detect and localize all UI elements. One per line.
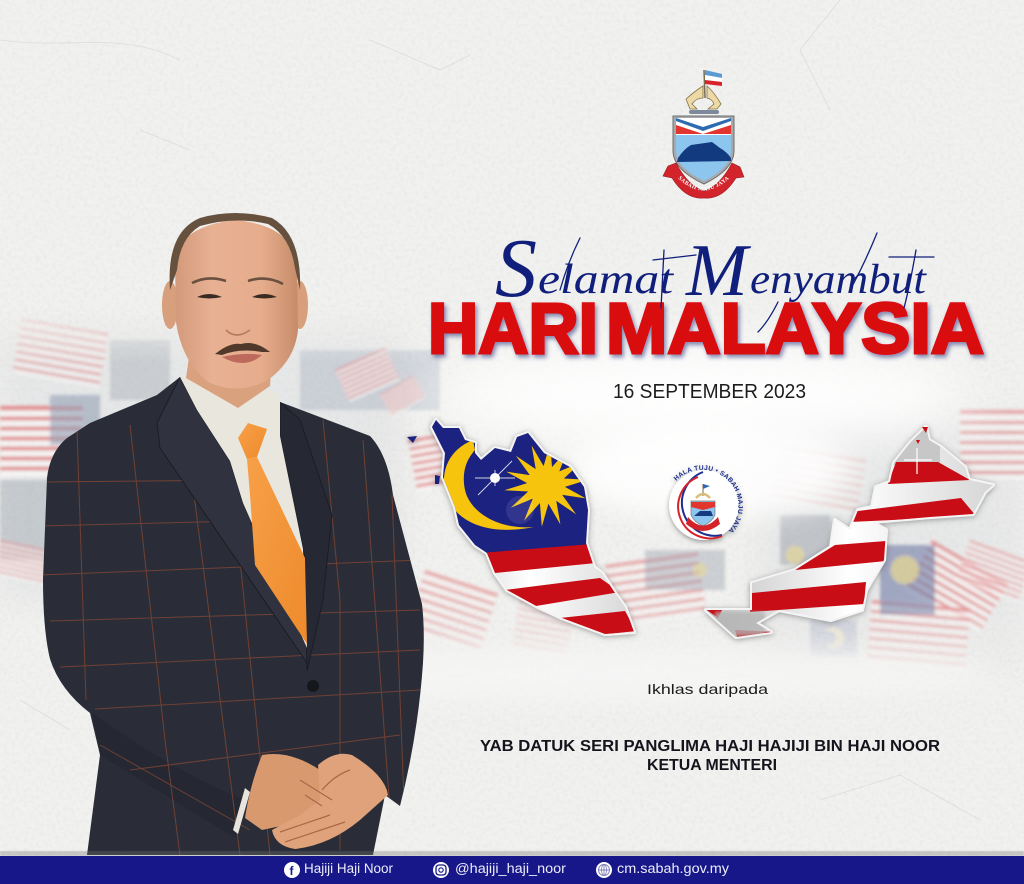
hair: [170, 213, 300, 290]
title: script greeting: [495, 222, 934, 332]
footer bar: [0, 856, 1024, 884]
arms motto scroll: SABAH MAJU JAYA: [678, 176, 729, 191]
text: sender name: YAB DATUK SERI PANGLIMA HAJI HAJIJI BIN HAJI NOOR: [480, 738, 941, 755]
text: sender title: KETUA MENTERI: [647, 757, 777, 774]
shirt: [180, 377, 307, 648]
facebook handle: Hajiji Haji Noor: [304, 861, 393, 876]
jacket button: [307, 680, 319, 692]
title: script greeting: M: [685, 230, 752, 312]
facebook icon: f: [290, 864, 294, 878]
arms crest: [686, 86, 721, 114]
map: peninsular malaysia with flag: [407, 415, 640, 640]
portrait: chief minister in plaid suit: [30, 213, 430, 860]
face: [175, 220, 298, 389]
logo arcs: [682, 472, 722, 536]
title: hari malaysia: [428, 290, 984, 369]
logo ring text: HALA TUJU • SABAH MAJU JAYA: [672, 465, 744, 536]
lens flare: [475, 461, 534, 524]
title: hari malaysia: MALAYSIA: [606, 290, 984, 369]
moustache: [215, 343, 270, 355]
title: script greeting: S: [495, 222, 537, 315]
arms flag: [704, 70, 722, 98]
title: script greeting: enyambut: [750, 257, 927, 303]
ears: [162, 281, 178, 329]
text: ikhlas daripada: Ikhlas daripada: [647, 681, 768, 697]
date: 16 SEPTEMBER 2023: [613, 381, 806, 403]
arms shield: [673, 116, 734, 184]
logo mini arms: [686, 484, 720, 531]
flare on sabah: [904, 448, 932, 474]
title: script greeting: elamat: [538, 257, 675, 303]
clasped hands: [245, 754, 388, 849]
instagram icon: [433, 862, 449, 878]
footer shadow: [0, 851, 1024, 856]
map: east malaysia with flag stripes: [700, 420, 1000, 645]
right lapel: [280, 402, 332, 671]
left lapel: [157, 377, 307, 663]
orange tie: [238, 423, 307, 644]
title: hari malaysia: HARI: [428, 290, 598, 369]
crowd waving flags backdrop: [0, 318, 1024, 680]
instagram handle: @hajiji_haji_noor: [455, 861, 567, 876]
eyebrows: [192, 278, 283, 284]
website icon: [596, 862, 612, 878]
facebook icon: [284, 862, 300, 878]
crescent: [444, 440, 534, 530]
suit jacket: [30, 370, 430, 860]
nose: [226, 330, 250, 335]
fourteen-point star: [504, 443, 588, 527]
website address: cm.sabah.gov.my: [617, 861, 729, 876]
hala tuju round logo: [666, 465, 744, 545]
plaid pattern: [40, 420, 420, 855]
neck: [186, 350, 272, 408]
shirt cuff: [233, 788, 250, 834]
mouth: [222, 354, 262, 363]
head: [162, 213, 308, 389]
state coat of arms: [662, 70, 744, 198]
white glow behind title and maps: [200, 345, 1000, 700]
eyes: [197, 294, 277, 298]
